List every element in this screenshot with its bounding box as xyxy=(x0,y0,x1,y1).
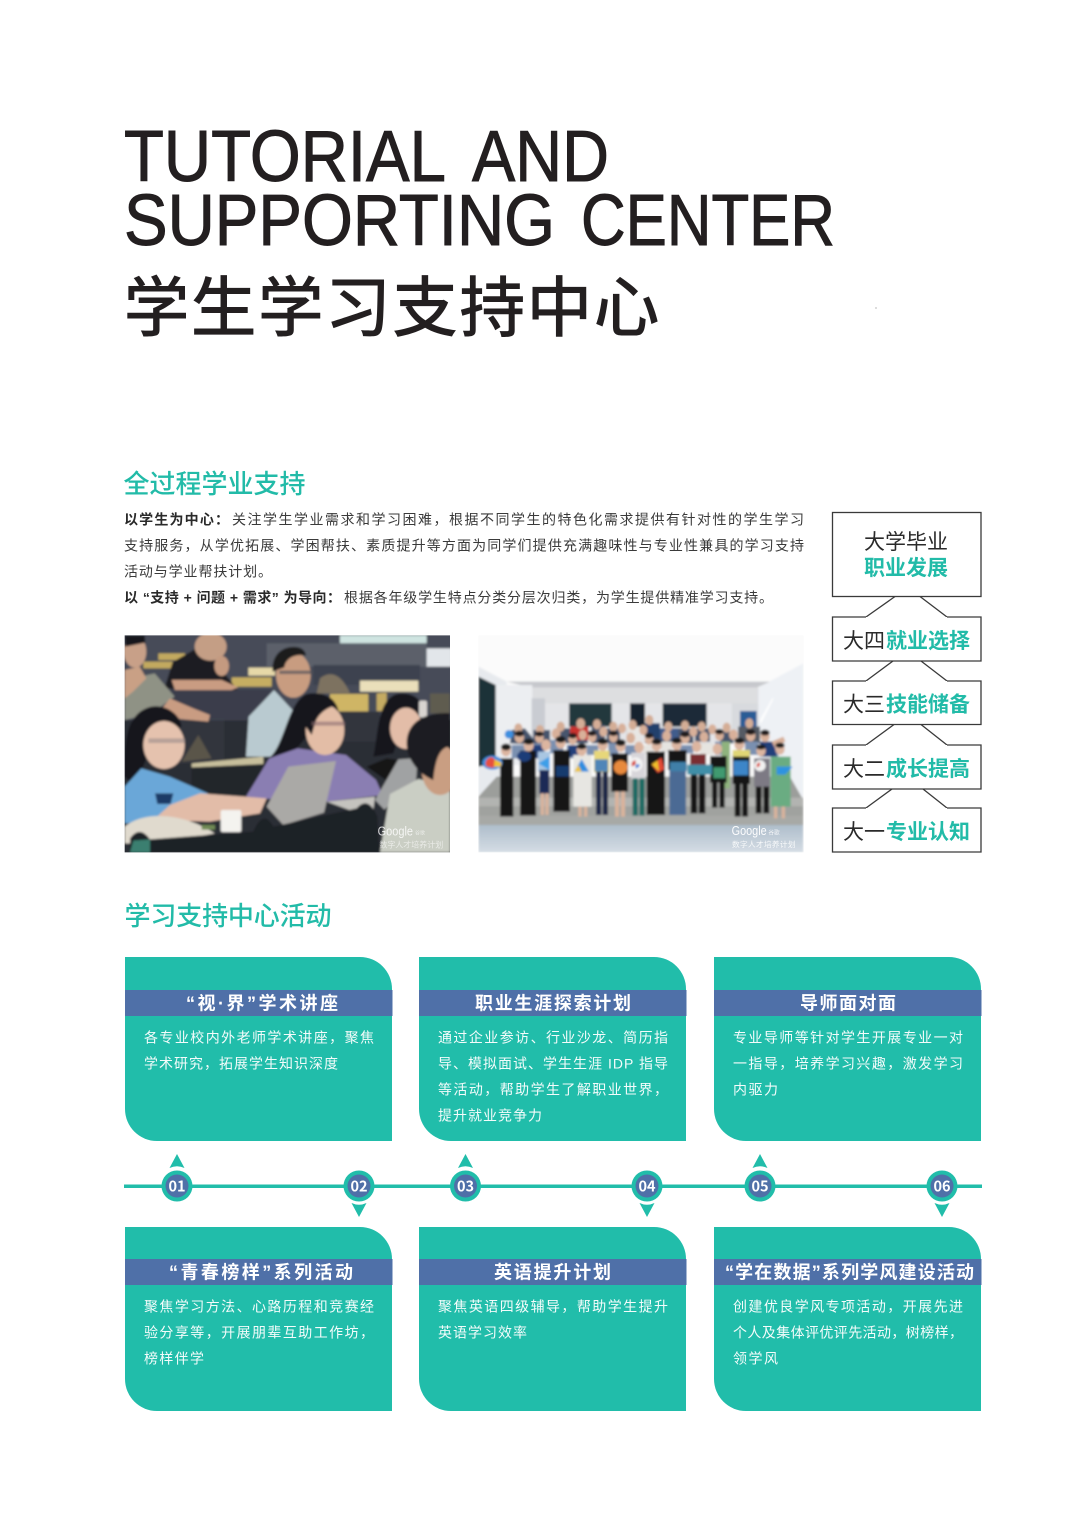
middle row people xyxy=(512,723,785,788)
box: graduation: 职业发展 xyxy=(864,557,948,580)
box: senior year: 就业选择 xyxy=(886,630,970,653)
panel: mentor face to face: 导师面对面 xyxy=(800,994,896,1014)
title: Chinese: 学生学习支持中心 xyxy=(124,271,660,345)
photo watermark: 谷歌 xyxy=(768,829,780,837)
panel: career exploration: 职业生涯探索计划 xyxy=(475,994,631,1014)
panel: study-style campaign: 创建优良学风专项活动，开展先进 xyxy=(733,1298,963,1314)
text block: intro xyxy=(124,512,804,606)
connectors xyxy=(866,596,947,808)
title: English xyxy=(124,116,835,261)
panel: study-style campaign: 领学风 xyxy=(733,1350,778,1366)
panel: mentor face to face: 专业导师等针对学生开展专业一对 xyxy=(733,1030,963,1046)
node 06 xyxy=(926,1170,958,1217)
photo watermark: 数字人才培养计划 xyxy=(379,839,443,849)
panel: study-style campaign xyxy=(714,1227,982,1411)
title: English: CENTER xyxy=(581,180,835,261)
photo watermark: Google xyxy=(378,824,413,838)
node 01 xyxy=(162,1154,192,1202)
panel: youth role models: “青春榜样”系列活动 xyxy=(169,1262,353,1282)
panel: career exploration: 导、模拟面试、学生生涯 IDP 指导 xyxy=(438,1056,668,1072)
text block: intro: 支持服务，从学优拓展、学困帮扶、素质提升等方面为同学们提供充满趣味性与专业性兼具的学习支持 xyxy=(124,538,804,554)
held signs xyxy=(482,730,793,778)
front seat backs xyxy=(130,803,379,852)
panel: academic lectures: 各专业校内外老师学术讲座，聚焦 xyxy=(144,1030,374,1046)
man in black, back row xyxy=(164,633,238,690)
timeline xyxy=(124,1154,982,1217)
box: sophomore year: 成长提高 xyxy=(886,757,970,781)
man in foreground right xyxy=(380,713,458,852)
panel: English improvement: 聚焦英语四级辅导，帮助学生提升 xyxy=(438,1298,668,1314)
title: English: SUPPORTING xyxy=(124,180,555,261)
box: freshman year: 大一 xyxy=(843,821,885,844)
panel: academic lectures: “视·界”学术讲座 xyxy=(186,992,338,1014)
panel: youth role models xyxy=(125,1227,392,1411)
panel: career exploration: 通过企业参访、行业沙龙、简历指 xyxy=(438,1030,668,1046)
panel: youth role models: 聚焦学习方法、心路历程和竞赛经 xyxy=(144,1298,374,1314)
box: graduation: 大学毕业 xyxy=(864,531,948,554)
panel: mentor face to face: 内驱力 xyxy=(733,1082,778,1098)
node 02 xyxy=(344,1170,374,1217)
panel: academic lectures xyxy=(125,957,392,1141)
node 04 xyxy=(632,1170,662,1217)
node 05: 05 xyxy=(751,1175,769,1196)
man in pale blue shirt xyxy=(246,647,313,757)
photo watermark xyxy=(732,826,795,848)
box: sophomore year: 大二 xyxy=(843,758,885,781)
woman behind right xyxy=(367,693,427,810)
panel: mentor face to face: 一指导，培养学习兴趣，激发学习 xyxy=(733,1056,963,1072)
box: junior year: 大三 xyxy=(843,694,885,716)
node 04: 04 xyxy=(638,1175,656,1196)
heading: whole-process academic support: 全过程学业支持 xyxy=(124,469,306,499)
photo watermark xyxy=(378,826,442,848)
panel: academic lectures: 学术研究，拓展学生知识深度 xyxy=(144,1056,338,1072)
box: junior year xyxy=(832,681,981,724)
text block: intro: 以 “支持 + 问题 + 需求” 为导向： xyxy=(124,590,341,606)
box: freshman year xyxy=(832,808,981,852)
panel: study-style campaign: 个人及集体评优评先活动，树榜样， xyxy=(733,1324,963,1340)
panel: English improvement: 英语学习效率 xyxy=(438,1324,527,1340)
box: senior year: 大四 xyxy=(843,630,885,653)
node 01: 01 xyxy=(168,1175,186,1196)
woman in purple xyxy=(246,693,383,825)
photo watermark: 数字人才培养计划 xyxy=(732,839,796,849)
text block: intro: 活动与学业帮扶计划。 xyxy=(124,564,272,580)
panel: career exploration: 等活动，帮助学生了解职业世界， xyxy=(438,1082,668,1098)
man in grey shirt, left xyxy=(124,635,210,722)
woman in blue, foreground left xyxy=(125,706,267,843)
panel: career exploration xyxy=(419,957,686,1141)
back row people xyxy=(510,715,760,745)
photo: group portrait xyxy=(478,664,804,852)
box: senior year xyxy=(832,617,981,661)
heading: learning support center activities: 学习支持中心活动 xyxy=(124,901,332,931)
panel: career exploration: 提升就业竞争力 xyxy=(438,1108,542,1124)
photo watermark: Google xyxy=(732,824,767,838)
panel: youth role models: 验分享等，开展朋辈互助工作坊， xyxy=(144,1324,374,1340)
panel: study-style campaign: “学在数据”系列学风建设活动 xyxy=(725,1262,974,1282)
box: junior year: 技能储备 xyxy=(886,694,970,716)
photo watermark: 谷歌 xyxy=(415,830,425,837)
node 05 xyxy=(744,1154,776,1202)
text block: intro: 以学生为中心： xyxy=(124,512,229,528)
box: graduation xyxy=(832,512,981,596)
title: English: AND xyxy=(472,116,609,197)
panel: mentor face to face xyxy=(714,957,982,1141)
panel: youth role models: 榜样伴学 xyxy=(144,1350,204,1366)
title: English: TUTORIAL xyxy=(124,116,446,197)
pyramid diagram: university progression xyxy=(832,512,981,852)
text block: intro: 根据各年级学生特点分类分层次归类，为学生提供精准学习支持。 xyxy=(344,590,773,606)
box: sophomore year xyxy=(832,745,981,789)
node 06: 06 xyxy=(933,1175,951,1196)
node 03 xyxy=(450,1154,481,1202)
panel: English improvement xyxy=(419,1227,686,1411)
box: freshman year: 专业认知 xyxy=(886,821,970,844)
front row people xyxy=(500,736,791,818)
node 03: 03 xyxy=(457,1175,474,1196)
node 02: 02 xyxy=(350,1175,368,1196)
text block: intro: 关注学生学业需求和学习困难，根据不同学生的特色化需求提供有针对性的学生学习 xyxy=(232,512,804,528)
panel: English improvement: 英语提升计划 xyxy=(494,1262,611,1282)
title xyxy=(124,116,835,345)
photo: students in lecture hall xyxy=(120,630,458,857)
